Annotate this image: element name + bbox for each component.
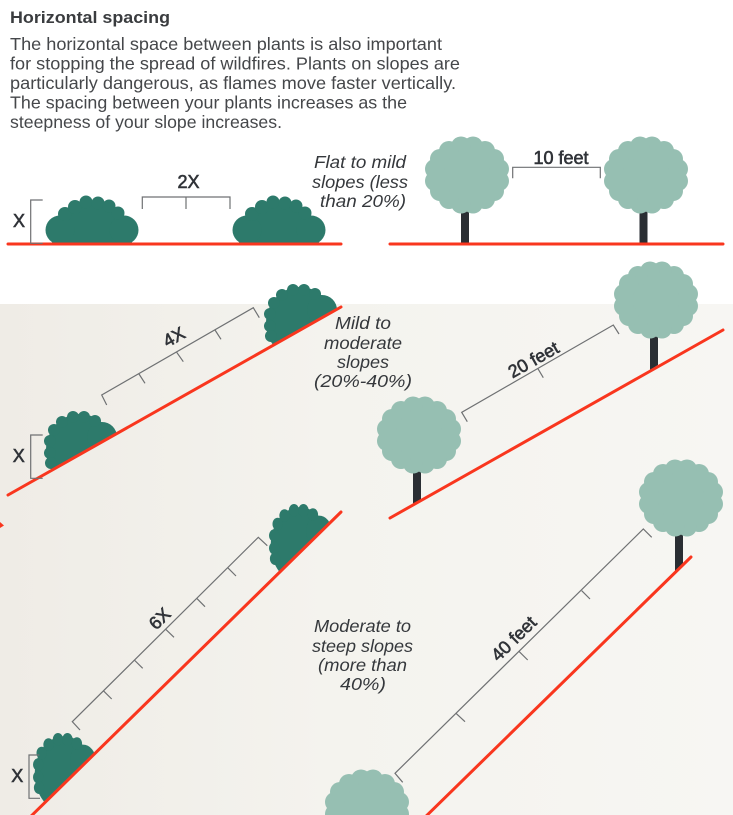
shrub lower <box>33 733 94 802</box>
slope label: mild to moderate: moderate <box>324 333 402 353</box>
label X: X <box>13 446 25 466</box>
height bracket <box>29 755 40 798</box>
panel: flat to mild slopes, trees <box>390 136 723 244</box>
spacing bracket <box>395 529 652 782</box>
title: Horizontal spacing <box>10 8 170 27</box>
shrub right <box>232 196 326 242</box>
tree lower <box>377 396 461 505</box>
height bracket <box>31 200 43 243</box>
label 20 feet: 20 feet <box>505 338 562 382</box>
spacing bracket <box>462 325 619 422</box>
slope label: moderate to steep: Moderate to <box>314 616 411 636</box>
intro text block: The spacing between your plants increases as the <box>10 92 407 112</box>
slope label: flat to mild: Flat to mild <box>314 152 407 172</box>
label 10 feet: 10 feet <box>533 148 589 168</box>
slope label: mild to moderate: Mild to <box>335 313 391 333</box>
slope label: flat to mild <box>312 152 408 211</box>
height bracket <box>31 435 43 478</box>
panel: moderate to steep slopes, shrubs <box>11 504 341 815</box>
slope line <box>8 307 341 495</box>
slope label: moderate to steep <box>312 616 413 694</box>
label X: X <box>11 766 23 786</box>
slope line <box>390 330 723 518</box>
panel: moderate to steep slopes, trees <box>325 460 723 815</box>
slope label: moderate to steep: steep slopes <box>312 636 413 656</box>
label 2X: 2X <box>177 172 200 192</box>
tree right <box>604 136 688 244</box>
spacing bracket <box>513 167 600 178</box>
label X: X <box>13 211 25 231</box>
intro text block: for stopping the spread of wildfires. Plants on slopes are <box>10 54 460 74</box>
slope label: moderate to steep: 40%) <box>340 674 386 694</box>
slope label: flat to mild: slopes (less <box>312 172 408 192</box>
slope label: flat to mild: than 20%) <box>320 191 406 211</box>
ground line <box>390 242 723 246</box>
panel: mild to moderate slopes, trees <box>377 262 723 518</box>
slope line <box>20 512 341 815</box>
panel: mild to moderate slopes, shrubs <box>8 284 341 495</box>
label 6X: 6X <box>145 604 175 634</box>
slope label: mild to moderate <box>314 313 412 391</box>
slope label: mild to moderate: slopes <box>337 352 389 372</box>
intro text block: particularly dangerous, as flames move faster vertically. <box>10 73 456 93</box>
shrub lower <box>44 411 116 469</box>
ground line <box>8 242 341 246</box>
slope label: moderate to steep: (more than <box>318 655 407 675</box>
red arrow tip at left edge <box>0 522 4 528</box>
slope label: mild to moderate: (20%-40%) <box>314 371 412 391</box>
shrub left <box>46 196 138 242</box>
spacing bracket <box>142 197 230 209</box>
panel: flat to mild slopes, shrubs <box>6 174 342 246</box>
background panel <box>0 304 733 815</box>
tree upper <box>639 460 723 573</box>
label 40 feet: 40 feet <box>487 612 540 665</box>
intro text block: steepness of your slope increases. <box>10 112 282 132</box>
tree left <box>425 136 509 244</box>
slope line <box>415 557 691 815</box>
shrub upper <box>264 284 337 344</box>
shrub upper <box>269 504 329 571</box>
tree upper <box>614 262 698 370</box>
spacing bracket <box>102 308 259 405</box>
label 4X: 4X <box>160 323 189 351</box>
tree lower <box>325 770 409 815</box>
intro text block: The horizontal space between plants is also important <box>10 34 442 54</box>
intro text block <box>10 34 460 132</box>
spacing bracket <box>72 537 267 730</box>
